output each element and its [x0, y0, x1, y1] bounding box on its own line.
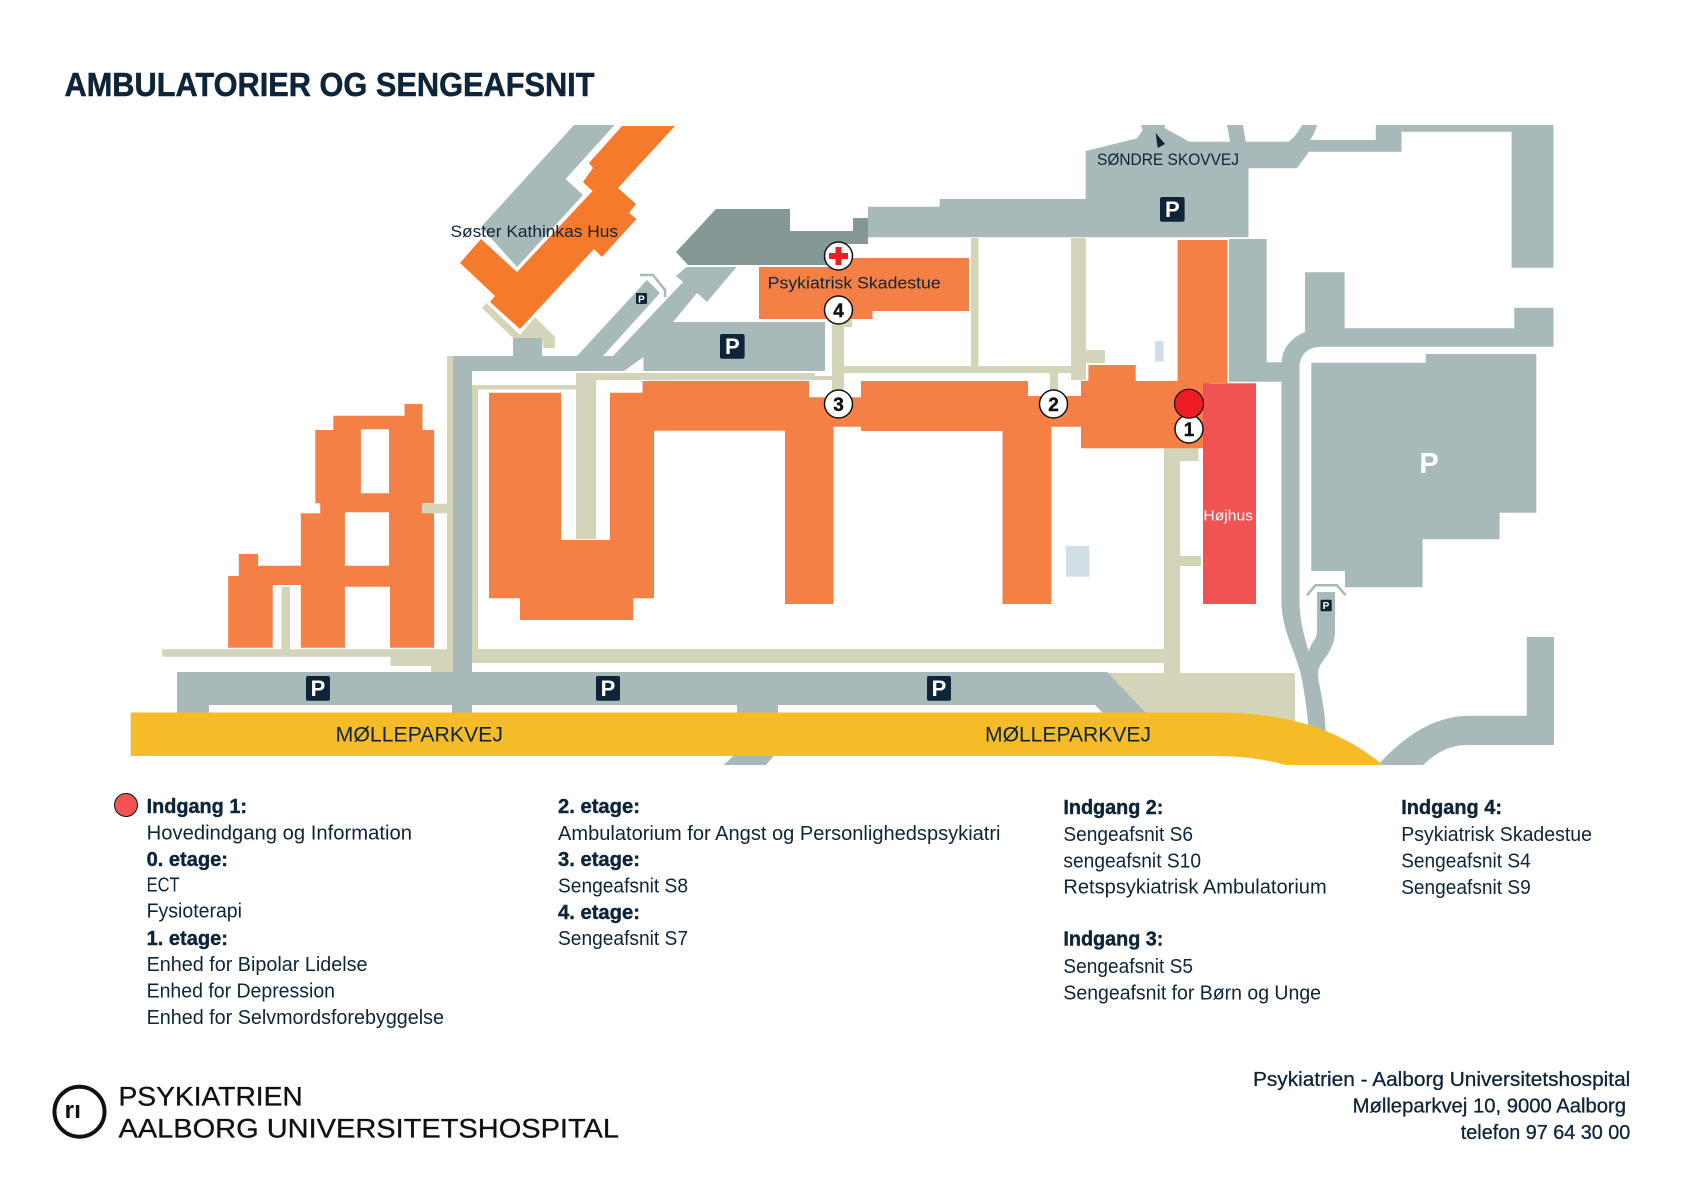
marker: entrance 3: 3 [833, 395, 844, 416]
marker: main entrance red dot [1174, 389, 1204, 418]
map: footpaths [162, 238, 1295, 726]
building: Højhus [1203, 383, 1256, 604]
light blue markers [1066, 341, 1164, 577]
logo [54, 1082, 619, 1143]
legend column 3: Sengeafsnit S6 [1063, 824, 1193, 846]
parking signs: P [1419, 448, 1439, 480]
marker: entrance 1: 1 [1184, 420, 1195, 441]
title: AMBULATORIER OG SENGEAFSNIT [64, 66, 594, 103]
legend column 4: Indgang 4: [1401, 797, 1502, 819]
legend column 2 [558, 796, 1000, 950]
legend column 3: Indgang 3: [1063, 929, 1163, 951]
building: left wing [228, 404, 434, 648]
north arrow [1156, 133, 1165, 148]
contact address: telefon 97 64 30 00 [1461, 1122, 1630, 1144]
label: Psykiatrisk Skadestue: Psykiatrisk Skadestue [768, 273, 941, 292]
contact address: Psykiatrien - Aalborg Universitetshospital [1253, 1069, 1630, 1091]
legend column 4: Sengeafsnit S9 [1401, 877, 1531, 899]
legend column 1 [147, 796, 444, 1029]
legend column 1: Indgang 1: [147, 796, 247, 818]
parking signs: P [725, 334, 740, 359]
road: Mølleparkvej [131, 712, 1383, 765]
label: Søndre Skovvej: SØNDRE SKOVVEJ [1097, 150, 1239, 169]
marker: entrance 2 [1040, 390, 1068, 418]
marker: entrance 3 [824, 390, 852, 418]
legend column 1: Enhed for Depression [147, 981, 335, 1003]
marker: entrance 4: 4 [833, 301, 844, 322]
parking signs: P [932, 676, 946, 701]
parking signs: P [601, 676, 615, 701]
label: Mølleparkvej east: MØLLEPARKVEJ [985, 724, 1151, 747]
label: Højhus: Højhus [1203, 508, 1253, 525]
legend column 2: Sengeafsnit S8 [558, 876, 688, 898]
legend column 1: 0. etage: [147, 849, 228, 871]
legend column 2: 2. etage: [558, 796, 640, 818]
building: dark grey [676, 209, 868, 265]
legend column 1: 1. etage: [147, 928, 228, 950]
legend column 4: Sengeafsnit S4 [1401, 850, 1531, 872]
parking signs: P [1165, 197, 1180, 222]
parking signs: P [311, 676, 325, 701]
building: Psykiatrisk Skadestue [759, 258, 969, 319]
legend column 3: sengeafsnit S10 [1063, 850, 1201, 872]
marker: entrance 4 [824, 296, 852, 324]
legend column 3: Retspsykiatrisk Ambulatorium [1063, 876, 1327, 898]
label: Mølleparkvej west: MØLLEPARKVEJ [336, 724, 503, 747]
legend column 4: Psykiatrisk Skadestue [1401, 824, 1592, 846]
legend: red dot [114, 794, 138, 816]
legend column 1: ECT [147, 875, 180, 897]
legend column 1: Fysioterapi [147, 900, 242, 922]
marker: entrance 2: 2 [1048, 395, 1059, 416]
logo: PSYKIATRIEN [118, 1082, 303, 1112]
legend column 4 [1401, 797, 1592, 899]
parking signs: P [638, 294, 645, 306]
contact address: Mølleparkvej 10, 9000 Aalborg [1353, 1095, 1626, 1117]
label: Søster Kathinkas Hus: Søster Kathinkas Hus [450, 222, 618, 241]
legend column 1: Enhed for Selvmordsforebyggelse [147, 1007, 444, 1029]
legend column 1: Hovedindgang og Information [147, 822, 412, 844]
legend column 3: Indgang 2: [1063, 797, 1163, 819]
legend column 2: 4. etage: [558, 902, 640, 924]
parking signs [306, 197, 1439, 701]
legend column 2: Ambulatorium for Angst og Personlighedspsykiatri [558, 823, 1000, 845]
legend column 3: Sengeafsnit S5 [1063, 956, 1193, 978]
building: main hospital [489, 240, 1228, 620]
building: Søster Kathinkas Hus [460, 126, 675, 329]
map: roads and parking [177, 125, 1554, 765]
parking signs: P [1323, 601, 1330, 612]
marker: entrance 1 [1175, 415, 1203, 443]
contact address [1253, 1069, 1630, 1144]
logo: rı [64, 1097, 81, 1124]
legend column 2: 3. etage: [558, 849, 640, 871]
legend column 3: Sengeafsnit for Børn og Unge [1063, 982, 1321, 1004]
marker: emergency cross [824, 242, 852, 270]
logo: AALBORG UNIVERSITETSHOSPITAL [118, 1113, 619, 1143]
legend column 3 [1063, 797, 1327, 1004]
map: thin parking entry markers [640, 275, 1346, 595]
legend column 1: Enhed for Bipolar Lidelse [147, 954, 368, 976]
legend column 2: Sengeafsnit S7 [558, 928, 688, 950]
